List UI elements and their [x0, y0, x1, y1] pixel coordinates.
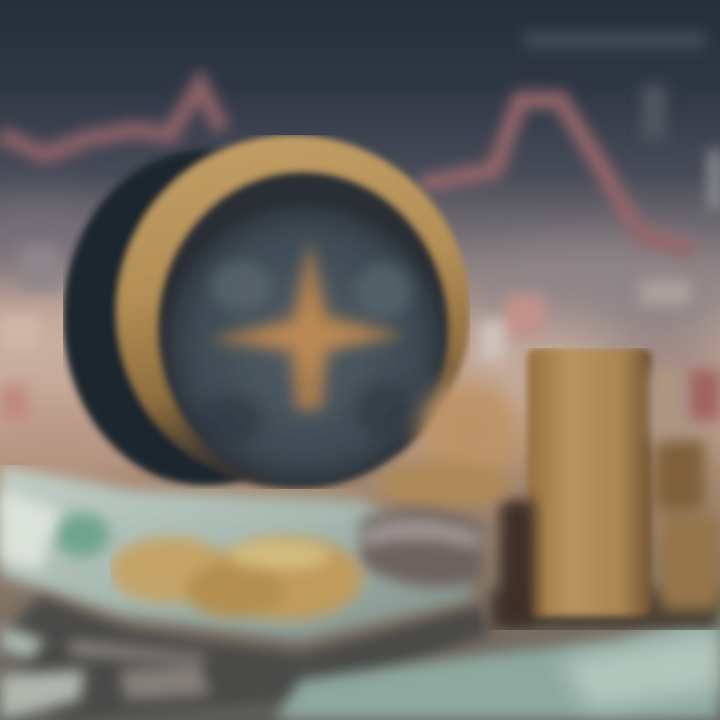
dark base shadow under stacks [490, 590, 720, 630]
compass back disc [63, 150, 347, 486]
gold stacks [110, 348, 720, 630]
banknote lower right highlight [560, 630, 720, 710]
dial texture [198, 260, 415, 445]
side gold stack right [650, 370, 720, 610]
compass inner rim [158, 172, 448, 484]
warm glow behind gold [420, 380, 520, 480]
banknote left [0, 465, 470, 640]
market chart backdrop [0, 32, 720, 480]
banknote lower right [275, 610, 720, 720]
compass star [210, 240, 405, 410]
compass gold ring [116, 135, 470, 489]
dark lower layer [0, 595, 490, 720]
compass [63, 135, 470, 489]
compass dial [169, 207, 441, 483]
dark gap by bar [500, 500, 535, 625]
tall gold bar [527, 348, 652, 616]
flat gold coin [380, 461, 510, 509]
gold coin pile [110, 536, 363, 620]
chart marks: faint blocks [0, 32, 720, 420]
chart line: right [420, 100, 695, 250]
lower left notes [0, 625, 210, 720]
silver coin stack [360, 509, 485, 587]
banknote green seal [54, 513, 110, 557]
banknotes, foreground [0, 465, 720, 720]
chart line: left [0, 85, 222, 155]
haze patches [0, 210, 720, 480]
banknote light sheen [0, 490, 60, 570]
